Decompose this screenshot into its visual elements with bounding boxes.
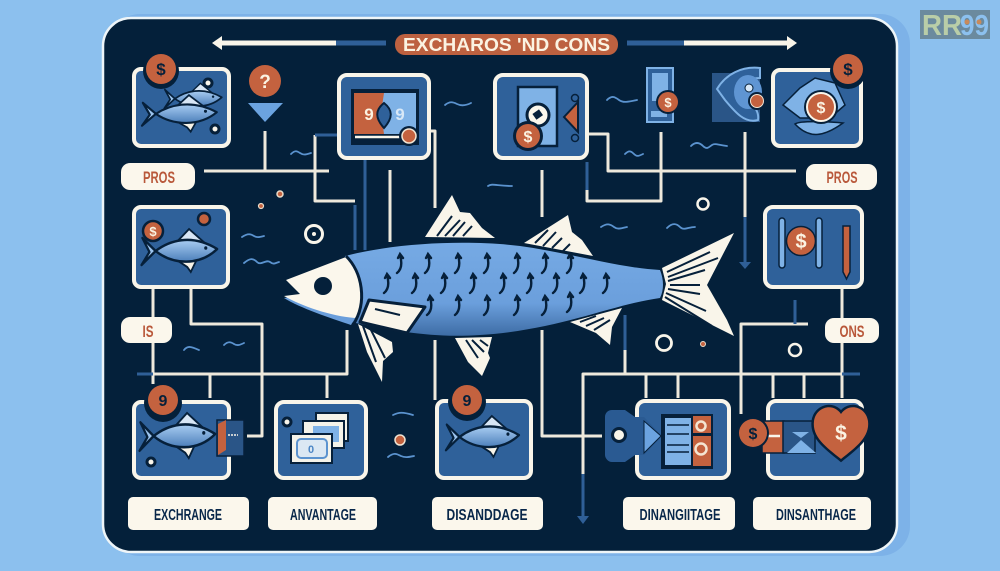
label: pros left	[121, 163, 195, 190]
badge: nine: 9	[463, 393, 472, 410]
watermark: RR	[922, 10, 962, 42]
title banner	[212, 34, 797, 55]
badge: dollar: $	[156, 60, 166, 79]
icon: tab connector	[217, 420, 244, 456]
icon: pens and coin: $	[795, 231, 807, 253]
label: advantage	[268, 497, 377, 530]
badge: dollar: $	[843, 60, 853, 79]
watermark	[920, 10, 990, 42]
badge: nine: 9	[159, 393, 168, 410]
card: document	[605, 401, 729, 478]
arrow: right	[627, 36, 797, 50]
central fish	[284, 195, 734, 382]
card: left fish with coins: $	[149, 224, 157, 239]
card: banknotes	[276, 402, 366, 478]
icon: question and triangle	[248, 65, 283, 122]
label: disadvantage one: DISANDDAGE	[446, 507, 528, 524]
scales	[384, 254, 609, 315]
card: exchange fish	[134, 384, 244, 478]
arrow: left	[212, 36, 386, 50]
label: disadvantage three	[753, 497, 871, 530]
card: envelope and heart	[737, 401, 868, 478]
fins	[358, 195, 622, 382]
icon: banknote and coin: $	[524, 129, 533, 146]
label: exchange: EXCHRANGE	[154, 507, 222, 524]
label: disadvantage two: DINANGIITAGE	[640, 507, 721, 524]
icon: coin with fins: $	[817, 100, 826, 117]
label: exchange	[128, 497, 249, 530]
icon: abstract fish with coin	[712, 68, 766, 122]
label: advantage: ANVANTAGE	[290, 507, 356, 524]
tail	[662, 233, 734, 336]
card: dollar fish	[773, 53, 866, 146]
card: centre fish	[437, 383, 531, 478]
label: is: IS	[142, 322, 154, 341]
card: left fish with coins	[134, 207, 228, 287]
pectoral fin	[360, 300, 425, 333]
body	[345, 243, 663, 336]
icon: small note with coin	[647, 68, 680, 122]
icon: small note with coin: $	[664, 95, 672, 110]
card: note with coins	[495, 75, 587, 158]
connector lines	[137, 131, 860, 518]
icon: document	[662, 415, 712, 468]
head	[284, 256, 362, 325]
card: right pens and coin	[765, 207, 862, 287]
main panel	[103, 18, 897, 552]
decorative waves	[184, 97, 727, 457]
icon: connector camera	[605, 410, 662, 462]
icon: fish	[446, 416, 519, 457]
label: pros right: PROS	[826, 168, 858, 187]
icon: stacked notes: 0	[308, 444, 314, 456]
label: ons	[825, 318, 879, 343]
icon: fish	[140, 413, 215, 458]
arrowheads: down	[577, 262, 751, 524]
label: disadvantage three: DINSANTHAGE	[776, 507, 856, 524]
icon: split note: 9	[364, 105, 374, 124]
icon: coin and envelope: $	[749, 426, 758, 443]
icon: split note	[351, 89, 419, 146]
icon: split note: 9	[395, 105, 405, 124]
title pill	[395, 34, 618, 55]
icon: heart with dollar: $	[835, 422, 847, 445]
label: pros right	[806, 164, 877, 190]
card: nine exchange	[339, 75, 429, 158]
fin ribs	[363, 216, 610, 362]
label: pros left: PROS	[143, 168, 175, 187]
panel shadow	[110, 14, 910, 556]
watermark: 99	[960, 10, 989, 42]
decorative circles	[258, 191, 801, 445]
title text: EXCHAROS 'ND CONS	[403, 35, 610, 55]
label: is	[121, 317, 172, 343]
label: ons: ONS	[840, 322, 864, 341]
card: two fish	[134, 53, 229, 146]
label: disadvantage two	[623, 497, 735, 530]
icon: fish pair	[142, 83, 222, 132]
icon: fish	[142, 229, 217, 272]
label: disadvantage one	[432, 497, 543, 530]
icon: question and triangle: ?	[259, 72, 271, 93]
